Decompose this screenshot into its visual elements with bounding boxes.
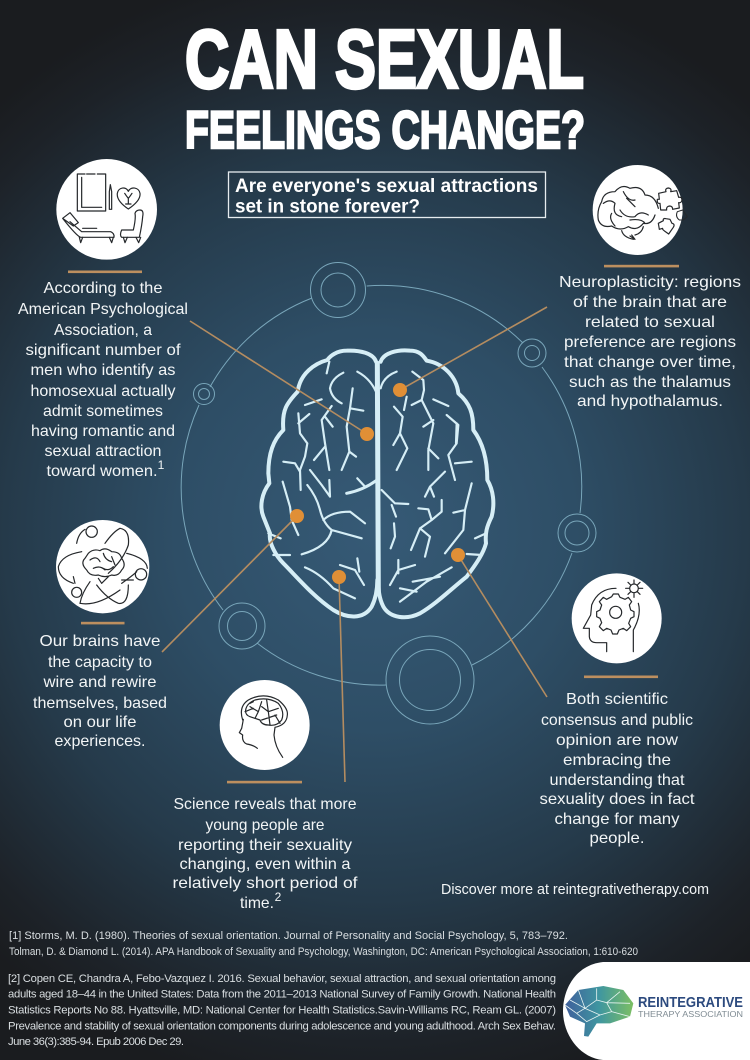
subtitle box <box>228 172 546 218</box>
website link: Discover more at reintegrativetherapy.com <box>441 882 709 898</box>
text: neuroplasticity: preference are regions <box>564 334 736 351</box>
logo panel <box>563 962 750 1060</box>
subtitle box: set in stone forever? <box>235 196 420 218</box>
icon: head with gear and sun <box>572 573 662 663</box>
divider bar <box>68 270 142 273</box>
text: neuroplasticity: that change over time, <box>564 354 736 371</box>
text: brains rewire <box>33 633 167 750</box>
text: young people: relatively short period of <box>172 875 358 892</box>
references 1: Tolman, D. & Diamond L. (2014). APA Handbook of Sexuality and Psychology, Washington, DC: American Psychological Association, 1:610-620 <box>9 946 638 958</box>
references 2: Prevalence and stability of sexual orientation components during adolescence and young adulthood. Arch Sex Behav. <box>8 1020 556 1032</box>
text: consensus: opinion are now <box>556 732 679 749</box>
divider bar <box>227 781 302 783</box>
text: APA: American Psychological <box>18 301 188 318</box>
text: consensus: change for many <box>554 811 680 828</box>
text: young people <box>172 796 358 912</box>
divider bar <box>81 622 124 624</box>
orbit rings <box>181 262 596 724</box>
text: neuroplasticity: Neuroplasticity: regions <box>559 274 741 291</box>
text: brains rewire: on our life <box>64 714 136 731</box>
references 2: June 36(3):385-94. Epub 2006 Dec 29. <box>8 1036 184 1048</box>
references 1 <box>9 930 638 958</box>
text: brains rewire: themselves, based <box>33 695 167 712</box>
orange brain markers <box>290 383 465 584</box>
text: APA: sexual attraction <box>44 443 162 460</box>
text: APA: having romantic and <box>31 423 175 440</box>
text: consensus <box>540 691 695 847</box>
text: APA: men who identify as <box>30 362 176 379</box>
references 2: [2] Copen CE, Chandra A, Febo-Vazquez I. 2016. Sexual behavior, sexual attraction, and sexual orientation among <box>8 973 556 985</box>
text: neuroplasticity: of the brain that are <box>573 294 727 311</box>
text: young people: time. <box>240 895 274 912</box>
logo panel: THERAPY ASSOCIATION <box>638 1009 743 1019</box>
text: neuroplasticity: such as the thalamus <box>569 374 731 391</box>
text: consensus: Both scientific <box>566 691 668 708</box>
text: APA: admit sometimes <box>43 403 163 420</box>
title: CAN SEXUAL <box>185 12 584 106</box>
text: APA: homosexual actually <box>30 383 176 400</box>
text: consensus: understanding that <box>550 772 685 789</box>
references 2: Statistics Reports No 88. Hyattsville, MD: National Center for Health Statistics.Savin-Williams RC, Ream GL. (2007) <box>8 1004 556 1016</box>
text: APA: significant number of <box>26 342 181 359</box>
connector lines <box>162 307 547 782</box>
text: consensus: people. <box>590 830 644 847</box>
text: consensus: consensus and public <box>541 712 693 729</box>
text: consensus: embracing the <box>563 752 671 769</box>
references 2 <box>8 973 556 1048</box>
icon: child head with brain <box>220 680 310 770</box>
references 1: [1] Storms, M. D. (1980). Theories of sexual orientation. Journal of Personality and Social Psychology, 5, 783–792. <box>9 930 568 942</box>
text: APA: According to the <box>44 280 162 297</box>
brain illustration <box>261 350 493 617</box>
title <box>185 12 585 160</box>
text: young people: Science reveals that more <box>174 796 356 813</box>
text: brains rewire: experiences. <box>54 733 146 750</box>
text: brains rewire: Our brains have <box>40 633 160 650</box>
text: APA: 1 <box>158 458 165 472</box>
text: APA: toward women. <box>46 463 158 480</box>
text: young people: 2 <box>275 890 282 904</box>
text: APA: Association, a <box>54 322 152 339</box>
divider bar <box>584 676 658 678</box>
subtitle box: Are everyone's sexual attractions <box>235 176 538 197</box>
text: young people: reporting their sexuality <box>178 837 352 854</box>
text: young people: young people are <box>206 817 324 834</box>
text: brains rewire: the capacity to <box>48 654 152 671</box>
icon: therapy couch and clipboard <box>56 159 157 260</box>
text: neuroplasticity <box>559 274 741 410</box>
text: young people: changing, even within a <box>180 856 351 873</box>
divider bar <box>604 265 679 267</box>
icon: brain and puzzle pieces <box>593 165 687 255</box>
icon: brain atom <box>56 520 149 613</box>
references 2: adults aged 18–44 in the United States: Data from the 2011–2013 National Survey of Family Growth. National Health <box>8 988 556 1000</box>
text: consensus: sexuality does in fact <box>540 791 695 808</box>
text: brains rewire: wire and rewire <box>42 674 156 691</box>
text: neuroplasticity: related to sexual <box>585 314 715 331</box>
text: neuroplasticity: and hypothalamus. <box>577 393 723 410</box>
text: APA <box>18 280 188 480</box>
title: FEELINGS CHANGE? <box>185 101 585 160</box>
